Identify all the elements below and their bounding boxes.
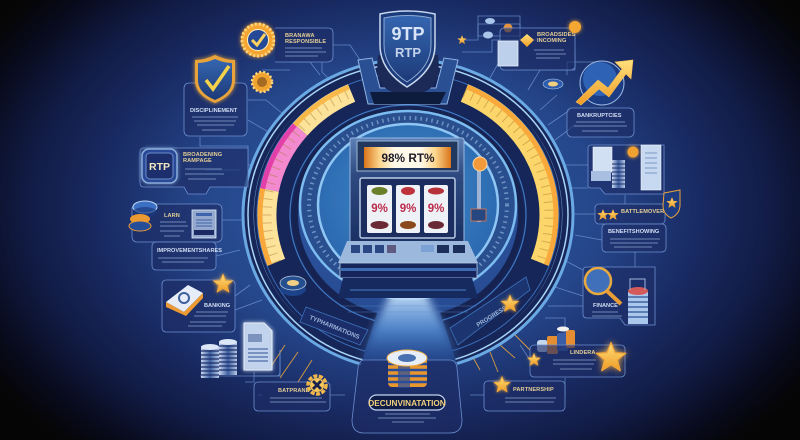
gear badge (241, 23, 275, 57)
reels: 9% (428, 203, 444, 215)
icon: chip stacks colored (537, 326, 575, 354)
shield subheading: RTP (395, 45, 421, 60)
panel: RTP text: BROADENING (183, 152, 222, 158)
slot machine (338, 138, 487, 312)
pedestal (358, 55, 458, 104)
panel: bottom left (254, 376, 330, 411)
small gear (252, 72, 272, 92)
icon: poker chips (129, 201, 157, 231)
icon: star (458, 36, 466, 44)
reels: 9% (371, 203, 388, 215)
icon: book (166, 285, 203, 316)
panel: two stars (595, 204, 665, 224)
icon: chip stacks (201, 339, 237, 378)
icon: document base (591, 171, 611, 181)
lever (471, 157, 487, 222)
icon: growth arrow (576, 60, 633, 105)
bottom arc label right: PROGRESSIVE (476, 300, 516, 329)
panel: doc and stacks (200, 323, 280, 378)
panel: LARN (132, 204, 222, 242)
panel: bottom right: PARTNERSHIP (513, 387, 554, 393)
panel: top right (498, 21, 581, 70)
icon: chip stack (387, 350, 427, 388)
panel: shield text (184, 83, 247, 136)
RTP button (142, 149, 177, 183)
icon: document (192, 210, 216, 238)
icon: shield with check (195, 55, 235, 103)
panel: documents (588, 145, 664, 194)
panel: book (162, 274, 235, 332)
connector lines (200, 24, 635, 395)
panel: big star: LINDERA (570, 350, 596, 356)
icon: magnifier (585, 268, 621, 304)
icon: X badge (308, 376, 326, 394)
icon: tall document (641, 145, 661, 190)
top right network icons (458, 16, 520, 44)
panel: star sub text: BENEFITSHOWING (608, 229, 659, 235)
icon: shield small (663, 190, 680, 218)
icon: diamond badge (520, 34, 534, 47)
panel: book: BANKING (204, 303, 230, 309)
RTP button: RTP (149, 161, 170, 173)
chip on connector (543, 79, 563, 93)
panel: bottom right (484, 376, 565, 411)
panel: LARN: LARN (164, 213, 180, 219)
panel: growth text (567, 108, 634, 137)
denomination label: DECUNVINATATION (368, 399, 446, 408)
panel: RTP text (140, 148, 248, 194)
icon: chip stack (612, 160, 625, 188)
panel: two stars: BATTLEMOVER (621, 209, 664, 215)
light beam (358, 290, 462, 362)
panel: bottom left: BATPRANE (278, 388, 310, 394)
shield heading: 9TP (391, 24, 425, 44)
inner ring (300, 111, 516, 299)
display (357, 141, 458, 171)
panel: star sub text (602, 224, 666, 252)
panel: sub text (152, 242, 222, 270)
panel: top left: RESPONSIBLE (285, 39, 326, 45)
icon: document (498, 41, 518, 66)
panel: magnifier (583, 267, 655, 325)
yellow rate band left (260, 87, 352, 265)
icon: document (593, 147, 612, 172)
panel: top right: BROADSIDES (537, 32, 575, 38)
panel: big star (528, 342, 626, 377)
panel: shield text: DISCIPLINEMENT (190, 108, 238, 114)
icon: star (213, 274, 233, 292)
machine base (338, 278, 478, 312)
bottom arc label left (300, 307, 368, 345)
chip on ring (280, 276, 306, 296)
icon: coin (569, 21, 581, 33)
bottom arc label left: TYPHARMATIONS (308, 314, 360, 341)
panel: growth text: BANKRUPTCIES (577, 113, 622, 119)
panel: top left (275, 28, 333, 62)
icon: chip stack (628, 279, 648, 324)
icon: star (494, 376, 510, 392)
reels (360, 178, 455, 238)
control deck (338, 241, 478, 278)
star on band (501, 295, 519, 311)
panel: top left: BRANAWA (285, 33, 315, 39)
icon: star (596, 342, 626, 371)
outer ring (243, 60, 573, 370)
shield badge (380, 11, 435, 87)
panel: RTP text: RAMPAGE (183, 158, 212, 164)
panel: sub text: IMPROVEMENTSHARES (157, 248, 222, 254)
icon: small star (528, 354, 540, 365)
reels: 9% (400, 203, 416, 215)
panel: denomination (352, 350, 462, 433)
yellow rate band right (464, 87, 556, 265)
bottom arc label right (450, 277, 530, 345)
panel: magnifier: FINANCE (593, 303, 618, 309)
icon: document (244, 323, 272, 370)
icon: coin (628, 146, 638, 158)
display: 98% RT% (381, 151, 435, 165)
panel: top right: INCOMING (537, 38, 566, 44)
